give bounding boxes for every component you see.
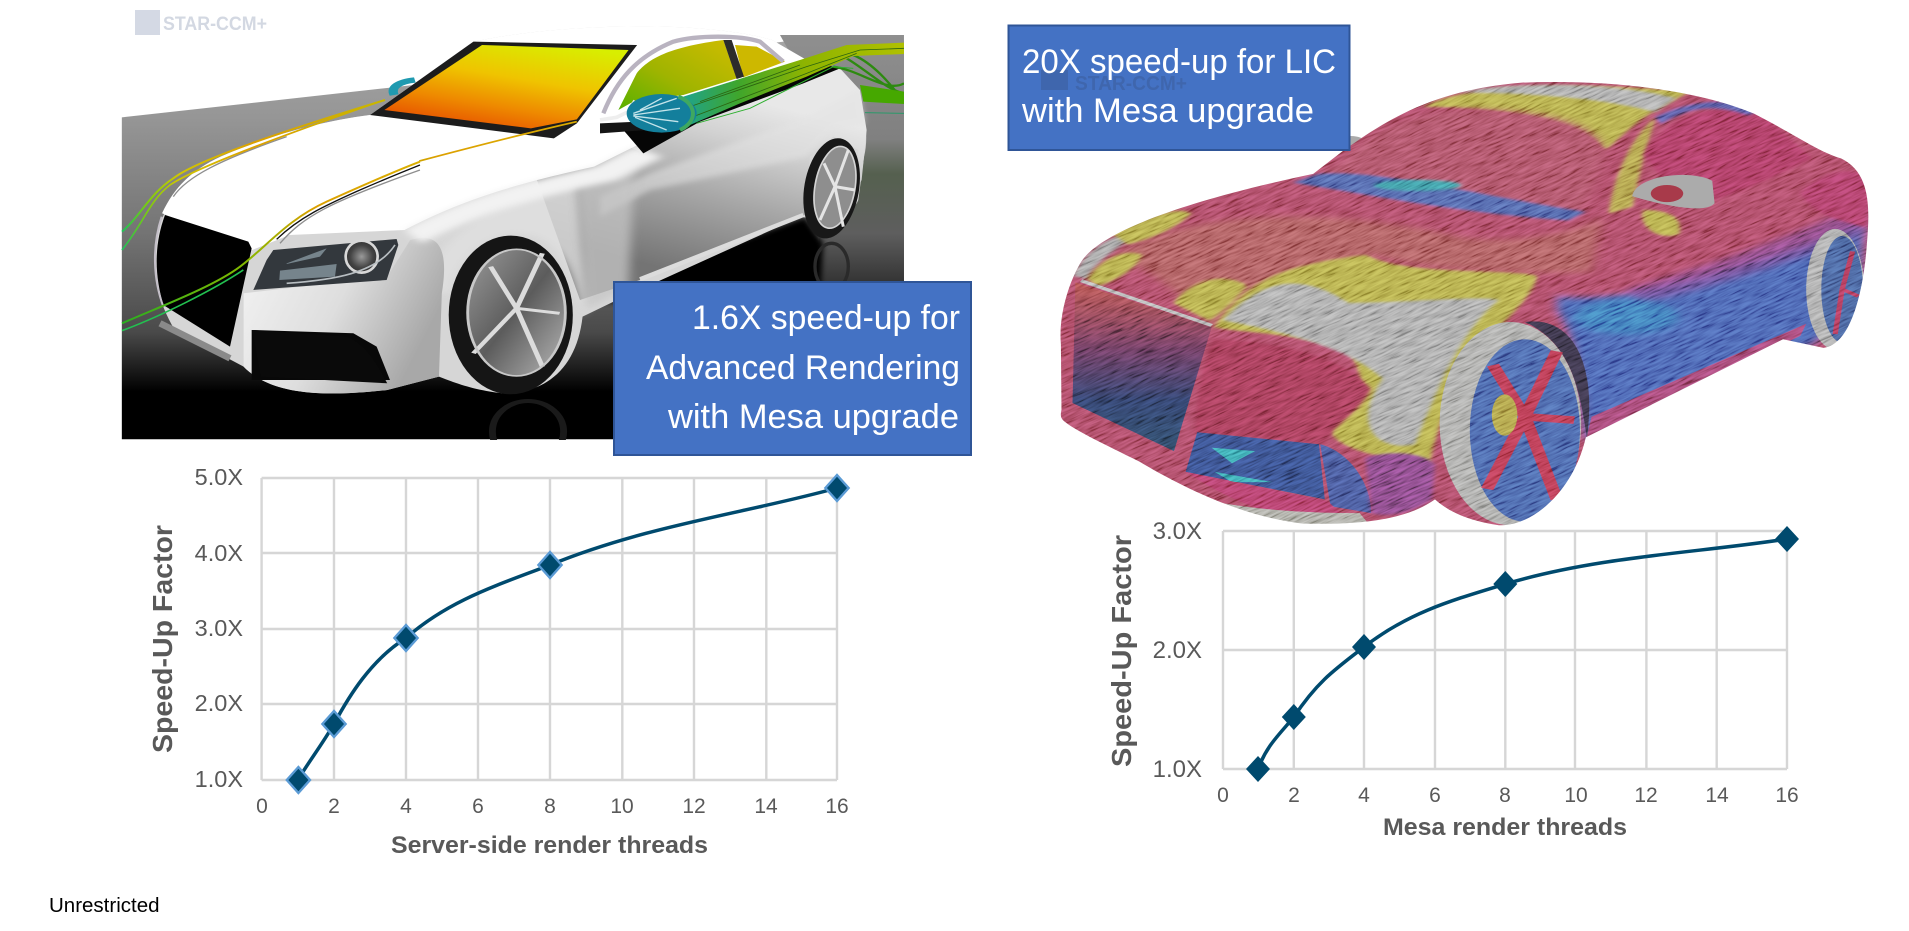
front bumper (244, 238, 444, 394)
lower intake (252, 330, 387, 383)
lower green line (697, 67, 853, 123)
data line (1258, 539, 1787, 769)
grille top chrome (1081, 281, 1212, 325)
second lower streamline (122, 270, 243, 331)
data markers (1246, 526, 1799, 782)
callout text line 1: 20X speed-up for LIC (1022, 43, 1336, 81)
windshield heat map (384, 45, 629, 128)
y-axis title: Speed-Up Factor (147, 525, 178, 753)
second upper streamline (122, 103, 377, 250)
hood grey patch (1223, 284, 1499, 446)
hood yellow outline (1215, 255, 1536, 465)
grille trim (155, 217, 163, 307)
front fender glow (542, 187, 590, 300)
x-axis ticks: 14 (1705, 784, 1729, 807)
lower streamline (122, 162, 420, 323)
grille (1072, 282, 1212, 451)
y-axis title: Speed-Up Factor (1106, 535, 1137, 767)
y-axis ticks: 1.0X (1153, 756, 1202, 783)
bundle fibres (690, 48, 904, 117)
callout box (614, 282, 971, 455)
y-axis ticks: 2.0X (195, 690, 243, 716)
x-axis ticks (1217, 784, 1799, 807)
y-axis ticks: 3.0X (195, 615, 243, 641)
rear teal line (865, 111, 904, 115)
mirror base (600, 122, 647, 133)
LIC streak texture (777, 0, 1909, 919)
x-axis title: Mesa render threads (1383, 814, 1627, 841)
chart: LIC speed-up (1106, 518, 1799, 841)
upper streamline (122, 100, 385, 232)
left mirror (393, 80, 415, 95)
right mirror (1632, 175, 1715, 208)
watermark in box: STAR-CCM+ (1075, 73, 1187, 95)
under-car shadow (606, 217, 826, 306)
chart: Advanced Rendering speed-up (147, 464, 849, 859)
mirror bracket (600, 101, 635, 120)
roof yellow (1423, 86, 1690, 149)
rear rim spokes (1835, 251, 1858, 334)
rear rim (808, 143, 862, 231)
rear rim (1821, 236, 1863, 343)
wheel arch (1525, 321, 1589, 437)
bright blue fender (1574, 300, 1679, 334)
side shadow (623, 66, 840, 153)
rim yellow hub (1492, 394, 1517, 436)
plot grid (262, 478, 837, 780)
picture: LIC car (777, 0, 1909, 919)
y-axis ticks (1153, 518, 1202, 783)
mirror red core (1651, 185, 1683, 202)
headlight panel (279, 248, 337, 280)
rear ground (780, 35, 904, 283)
x-axis ticks: 14 (754, 795, 778, 818)
side window (618, 40, 737, 110)
left mirror (1337, 136, 1365, 148)
shoulder highlight (600, 90, 865, 217)
x-axis ticks: 12 (682, 795, 706, 818)
rear wheel reflection (815, 243, 848, 290)
upper hood brown-red (1116, 216, 1603, 331)
car surface colour map (777, 0, 1909, 919)
lower bumper pink (1186, 472, 1348, 520)
callout: Advanced Rendering (614, 282, 971, 455)
teal glow (1374, 180, 1461, 191)
car body base (155, 26, 866, 394)
windshield frame (370, 42, 637, 138)
grille (157, 215, 252, 347)
logo icon (135, 10, 160, 35)
bulb green edge (678, 97, 693, 130)
data markers (287, 475, 849, 793)
lower intake top (252, 330, 390, 380)
front rim (1470, 339, 1580, 522)
roof rear blue (1655, 102, 1760, 124)
bumper red (1194, 339, 1371, 444)
side window crimson (1644, 109, 1812, 207)
window pillar (723, 40, 744, 79)
mirror bulb (627, 94, 697, 133)
mirror yellow (1643, 210, 1680, 236)
streamline bundle (683, 43, 904, 125)
lower intake (1186, 432, 1325, 499)
y-axis ticks: 5.0X (195, 464, 243, 490)
plot grid (1223, 531, 1787, 769)
nose grey (1072, 234, 1139, 279)
windshield red (1319, 110, 1604, 214)
rear streamline spread (833, 55, 904, 102)
watermark icon in box (1041, 70, 1068, 90)
x-axis ticks (256, 795, 849, 818)
callout text line 3: with Mesa upgrade (667, 398, 959, 436)
x-axis ticks: 6 (472, 795, 484, 818)
lower front and front wheel (252, 42, 637, 462)
rim (468, 249, 565, 376)
callout: LIC (1008, 26, 1350, 150)
door blend (577, 167, 634, 310)
rim lip (468, 249, 565, 376)
rear side window (735, 45, 785, 77)
front rim spokes (1487, 351, 1574, 499)
rear side dark purple band (1626, 203, 1864, 303)
intake teal flashes (1212, 448, 1273, 482)
side blue gradient (1557, 224, 1864, 441)
x-axis ticks: 4 (1358, 784, 1370, 807)
side window yellow trim (1609, 117, 1655, 214)
hood and roof white (162, 26, 818, 250)
logo: STAR-CCM+: STAR-CCM+ (163, 14, 267, 35)
lower skirt (1586, 324, 1806, 441)
lip grey (1220, 503, 1371, 527)
crimson base (1035, 69, 1893, 534)
y-axis ticks: 1.0X (195, 766, 243, 792)
front tyre (1440, 322, 1581, 525)
y-axis ticks: 4.0X (195, 540, 243, 566)
lower lip (160, 323, 230, 358)
lower streamline continuation (419, 122, 577, 161)
x-axis ticks: 8 (1499, 784, 1511, 807)
y-axis ticks (195, 464, 243, 792)
x-axis ticks: 12 (1634, 784, 1658, 807)
sill (640, 215, 803, 279)
rear fender crimson (1800, 171, 1870, 227)
x-axis ticks: 8 (544, 795, 556, 818)
headlight lens (346, 241, 378, 273)
hood edge blend (404, 147, 663, 243)
front wheel reflection (489, 399, 567, 440)
callout box (1008, 26, 1350, 150)
x-axis ticks: 2 (328, 795, 340, 818)
rear spokes (820, 150, 855, 227)
callout: LIC: with Mesa upgrade (1021, 92, 1314, 130)
x-axis ticks: 2 (1288, 784, 1300, 807)
streamlines: hood (122, 100, 420, 331)
footer label: Unrestricted (49, 894, 160, 917)
nose yellow patches (1087, 211, 1246, 320)
callout text line 2: Advanced Rendering (646, 349, 960, 387)
callout text line 1: 1.6X speed-up for (692, 299, 960, 337)
bulb rays (633, 98, 680, 130)
grille and trim (155, 137, 420, 380)
x-axis ticks: 0 (256, 795, 268, 818)
ground backdrop (122, 42, 904, 439)
side windows and streamlines (600, 37, 904, 290)
corner red and blue (1365, 453, 1435, 515)
y-axis ticks: 2.0X (1153, 637, 1202, 664)
fog lamp housing (1320, 444, 1371, 513)
black line (277, 165, 420, 239)
y-axis ticks: 3.0X (1153, 518, 1202, 545)
x-axis ticks: 4 (400, 795, 412, 818)
rear tyre (1806, 229, 1864, 350)
x-axis title: Server-side render threads (391, 832, 708, 859)
headlight (253, 239, 398, 290)
x-axis ticks: 16 (1775, 784, 1799, 807)
x-axis ticks: 10 (610, 795, 634, 818)
x-axis ticks: 16 (825, 795, 849, 818)
window trim (603, 37, 783, 113)
x-axis ticks: 10 (1564, 784, 1588, 807)
tyre (449, 236, 573, 394)
rear green band (860, 85, 904, 104)
picture: Advanced Rendering car (122, 10, 904, 462)
data line (298, 488, 837, 779)
x-axis ticks: 0 (1217, 784, 1229, 807)
hood crease (173, 137, 420, 243)
headlight sweep (287, 245, 395, 283)
rear tyre (796, 134, 867, 243)
x-axis ticks: 6 (1429, 784, 1441, 807)
spokes (473, 253, 560, 367)
blue band at windshield base (1293, 173, 1586, 220)
mirror shell (1632, 175, 1715, 208)
rear door panel (533, 68, 867, 300)
roof grey strip (1458, 85, 1676, 112)
